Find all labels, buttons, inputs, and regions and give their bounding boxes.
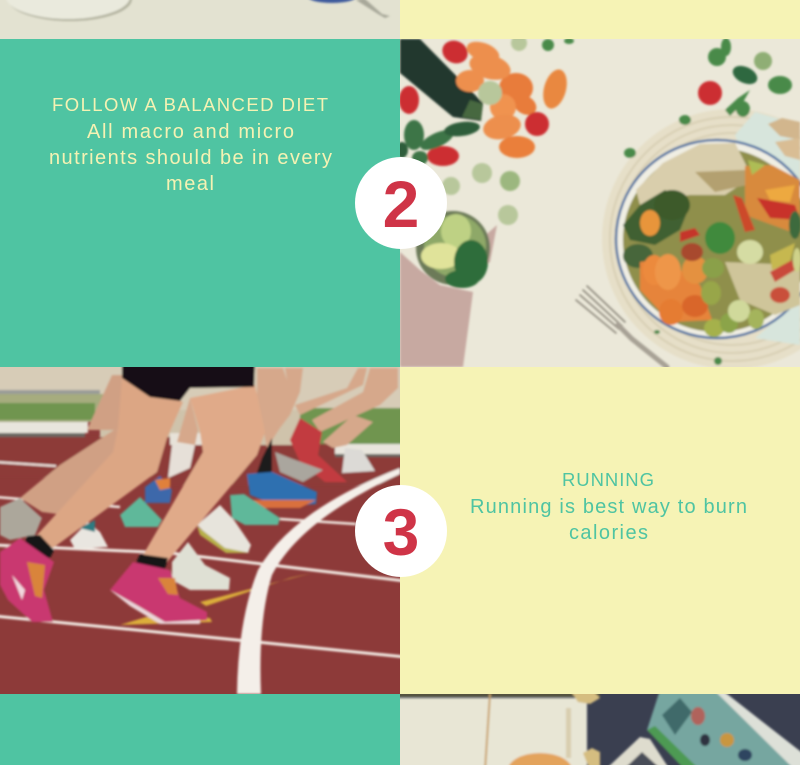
text block: running <box>470 469 747 544</box>
pink cloth <box>400 252 473 367</box>
curved white lane <box>237 468 400 694</box>
number badge 3 <box>355 485 447 577</box>
pink shoes <box>0 538 54 622</box>
number badge 2 <box>355 157 447 249</box>
text block: running: RUNNING <box>562 469 654 490</box>
background shoes <box>247 472 317 507</box>
hair <box>508 753 572 765</box>
text block: balanced diet <box>49 94 332 195</box>
blue napkin <box>735 112 800 345</box>
carrots <box>456 38 571 158</box>
front runner legs <box>37 378 183 548</box>
fork <box>576 286 667 367</box>
zucchini <box>400 39 483 121</box>
photo: runners on track <box>0 367 400 694</box>
panel: top right yellow <box>400 0 800 39</box>
small lime bowl <box>416 211 490 285</box>
text block: running: calories <box>569 522 648 544</box>
open notebook <box>395 698 587 765</box>
herb sprigs <box>542 38 792 365</box>
gold confetti <box>570 690 600 704</box>
number badge 2: 2 <box>383 167 419 241</box>
photo: healthy food bowl <box>400 39 800 367</box>
number badge 3: 3 <box>383 495 419 569</box>
laptop <box>605 737 670 765</box>
black shorts <box>122 362 255 401</box>
background right legs <box>177 368 398 448</box>
panel: balanced diet teal <box>0 39 400 367</box>
left basil leaves <box>396 120 481 165</box>
panel: running yellow <box>400 367 800 694</box>
ginger <box>768 118 800 140</box>
tomatoes <box>399 37 722 166</box>
black socks <box>22 535 54 558</box>
text block: running: Running is best way to burn <box>470 496 747 518</box>
text block: balanced diet: meal <box>166 173 214 195</box>
rear left runner leg <box>20 428 120 515</box>
placemat <box>602 109 800 369</box>
yellow marking <box>200 573 312 606</box>
panel: bottom left teal <box>0 694 400 765</box>
photo: plate on table (top left) <box>0 0 400 39</box>
text block: balanced diet: All macro and micro <box>87 121 294 143</box>
text block: balanced diet: FOLLOW A BALANCED DIET <box>52 94 328 115</box>
track lane lines <box>0 462 405 657</box>
text block: balanced diet: nutrients should be in every <box>49 147 332 169</box>
brussels sprouts <box>442 35 772 225</box>
background sand and grass <box>0 362 405 410</box>
salad bowl <box>616 140 800 338</box>
photo: notebook and laptop <box>400 694 800 765</box>
